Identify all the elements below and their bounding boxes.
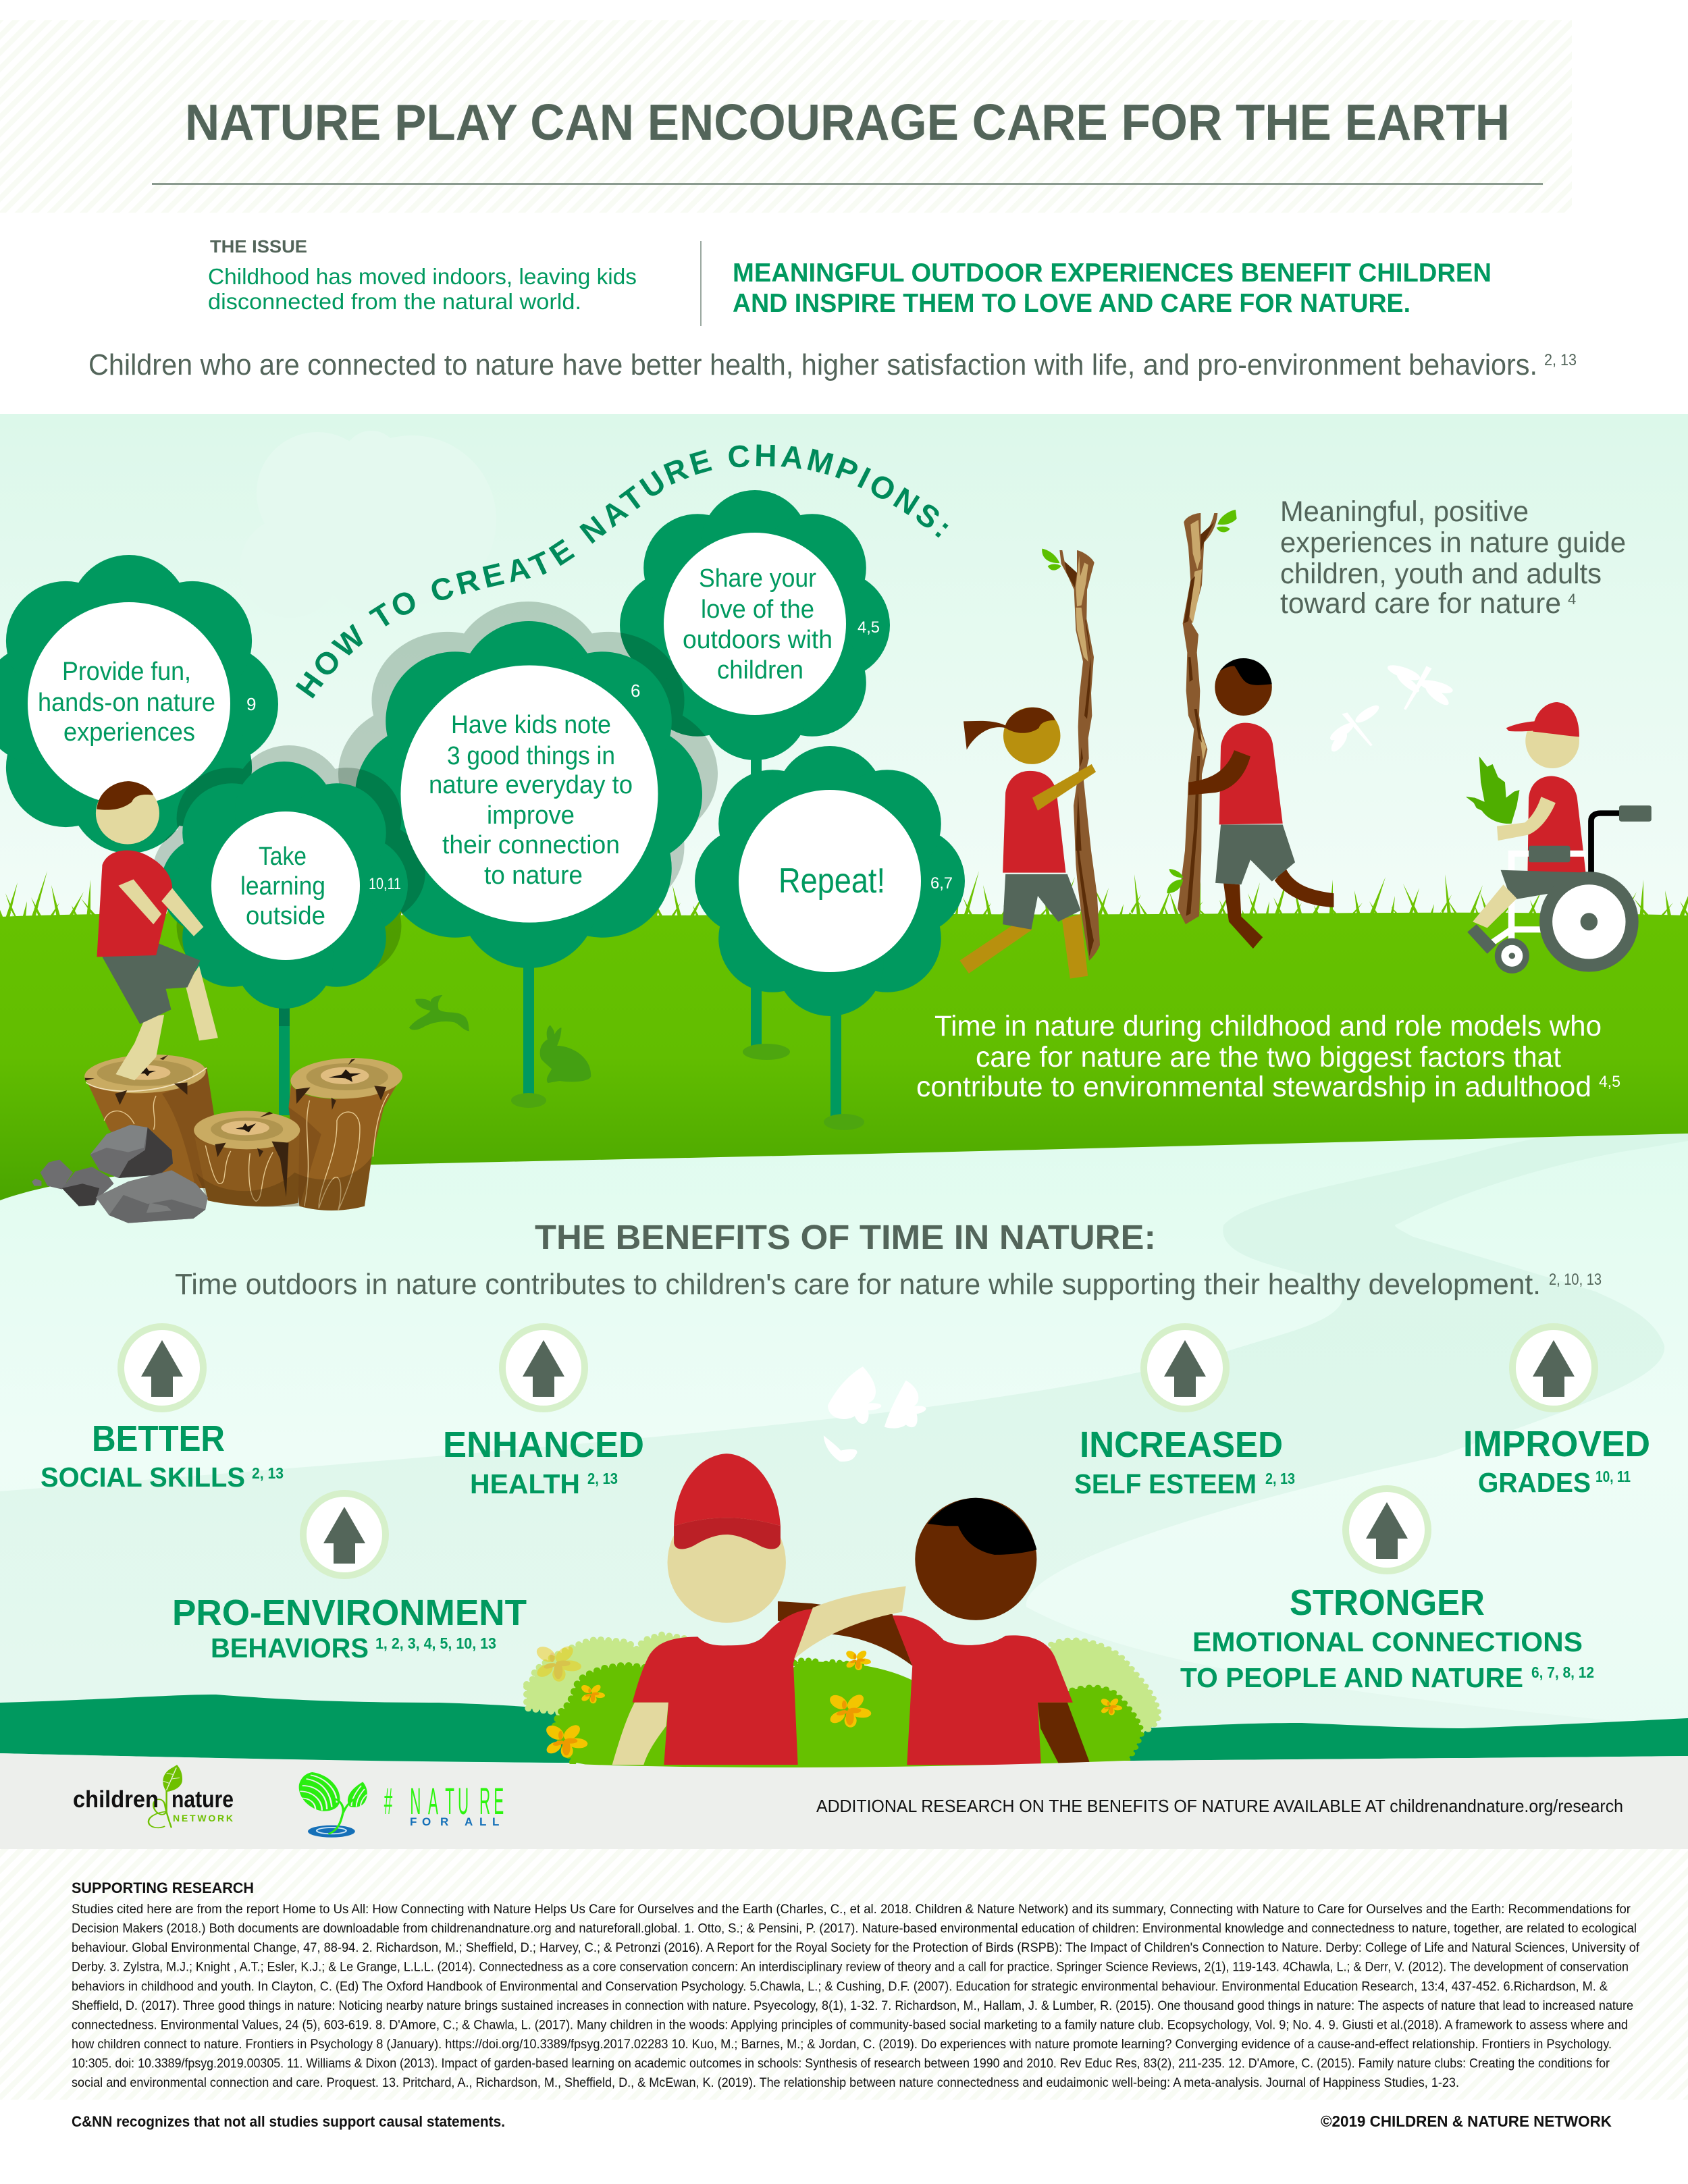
cap dome bbox=[674, 1454, 781, 1526]
boy with stick bbox=[1167, 510, 1334, 949]
shirt bbox=[97, 851, 172, 957]
handle bbox=[1591, 814, 1622, 873]
references: how children connect to nature. Frontiers in Psychology 8 (January). https://doi.org/10.3389/fpsyg.2017.02283 10. Kuo, M.; Barnes, M.; & Jordan, C. (2019). Do experiences with nature promote learning? Converging evidence of a cause-and-effect relationship. Frontiers in Psychology. bbox=[72, 2037, 1612, 2052]
leaf bunch bbox=[1466, 756, 1519, 824]
benefits heading: THE BENEFITS OF TIME IN NATURE: bbox=[535, 1218, 1156, 1256]
flower: take learning outside: Take bbox=[259, 843, 307, 871]
the issue block: disconnected from the natural world. bbox=[208, 289, 581, 314]
head bbox=[1215, 659, 1272, 716]
flower: take learning outside: learning bbox=[240, 872, 325, 901]
girl with stick bbox=[959, 549, 1100, 978]
benefit: enhanced health bbox=[443, 1327, 644, 1499]
references: behaviors in childhood and youth. In Clayton, C. (Ed) The Oxford Handbook of Environmental and Conservation Psychology. 5.Chawla, L.; & Cushing, D.F. (2007). Education for strategic environmental behaviour. Environmental Education Research, 13:4, 437-452. 6.Richardson, M. & bbox=[72, 1979, 1608, 1994]
standing leg bbox=[115, 1015, 164, 1080]
stewardship statement: contribute to environmental stewardship in adulthood bbox=[916, 1071, 1591, 1103]
friend's arm behind bbox=[778, 1601, 912, 1666]
hashtag nature wordmark: #NATURE bbox=[384, 1780, 504, 1823]
the issue block bbox=[208, 236, 637, 314]
title: NATURE PLAY CAN ENCOURAGE CARE FOR THE EARTH bbox=[185, 94, 1510, 151]
arm bbox=[1032, 764, 1096, 811]
hair bbox=[97, 781, 153, 810]
benefit: stronger emotional connections: TO PEOPLE AND NATURE bbox=[1180, 1662, 1523, 1693]
logo: children and nature network: nature bbox=[172, 1786, 234, 1813]
meaningful experiences text: 4 bbox=[1568, 591, 1576, 608]
logo: children and nature network: children bbox=[73, 1786, 159, 1813]
cap band bbox=[674, 1518, 781, 1549]
green ground band bbox=[0, 1695, 1688, 1763]
boy climbing stumps bbox=[96, 781, 218, 1080]
lower section background with swoosh bbox=[0, 1114, 1688, 1776]
hair bbox=[964, 708, 1055, 749]
benefit: increased self esteem: SELF ESTEEM bbox=[1074, 1468, 1257, 1499]
arm around friend bbox=[794, 1587, 906, 1659]
stewardship statement: care for nature are the two biggest factors that bbox=[976, 1041, 1561, 1073]
key message: MEANINGFUL OUTDOOR EXPERIENCES BENEFIT CHILDREN bbox=[733, 259, 1492, 288]
logo: nature for all bbox=[299, 1772, 504, 1838]
head bbox=[668, 1502, 786, 1623]
wheelchair frame bbox=[1493, 853, 1586, 942]
stump base shade bbox=[196, 1156, 372, 1210]
meaningful experiences text: children, youth and adults bbox=[1280, 558, 1602, 590]
shirt bbox=[633, 1609, 812, 1765]
references: Studies cited here are from the report Home to Us All: How Connecting with Nature Helps Us Care for Ourselves and the Earth (Charles, C., et al. 2018. Children & Nature Network) and its summary, Connecting with Nature to Care for Ourselves and the Earth: Recommendations for bbox=[72, 1902, 1631, 1917]
shirt bbox=[893, 1616, 1073, 1765]
flower: have kids note, text disc: nature everyday to bbox=[429, 771, 633, 799]
benefit: improved grades: GRADES bbox=[1478, 1467, 1591, 1498]
causal disclaimer: C&NN recognizes that not all studies support causal statements. bbox=[72, 2113, 505, 2130]
stewardship statement: 4,5 bbox=[1599, 1073, 1620, 1091]
benefit: increased self esteem: 2, 13 bbox=[1265, 1470, 1295, 1487]
intro statement: Children who are connected to nature have better health, higher satisfaction with life, and pro-environment behaviors. bbox=[88, 348, 1537, 381]
shorts bbox=[102, 942, 201, 1024]
logo: children and nature network: NETWORK bbox=[173, 1813, 233, 1823]
flower: repeat bbox=[695, 746, 965, 1130]
flower: provide fun: experiences bbox=[63, 718, 195, 747]
yellow flowers on bushes bbox=[534, 1643, 1122, 1758]
flower: share your love: Share your bbox=[699, 564, 816, 593]
flower: have kids note, text disc: to nature bbox=[484, 861, 583, 890]
benefits heading: 2, 10, 13 bbox=[1549, 1271, 1602, 1289]
shirt bbox=[1219, 723, 1283, 824]
flower: share your love bbox=[620, 490, 890, 1060]
main bushes bbox=[555, 1661, 864, 1768]
legs bbox=[959, 914, 1088, 978]
benefit: better social skills: BETTER bbox=[92, 1418, 225, 1459]
meaningful experiences text: toward care for nature bbox=[1280, 587, 1561, 620]
curved heading: how to create nature champions: HOW TO CREATE NATURE CHAMPIONS: bbox=[296, 444, 948, 699]
foot plate bbox=[1467, 924, 1496, 954]
arms bbox=[118, 880, 203, 936]
red cap bbox=[1506, 702, 1579, 737]
boy with dark hair, back view bbox=[893, 1498, 1090, 1765]
flower: repeat: 6,7 bbox=[930, 874, 953, 893]
benefits heading bbox=[175, 1218, 1602, 1301]
head bbox=[1525, 714, 1579, 768]
benefit: stronger emotional connections: 6, 7, 8, 12 bbox=[1531, 1663, 1594, 1681]
tree stumps bbox=[84, 1052, 404, 1210]
large wheel bbox=[1539, 872, 1639, 972]
intro statement: 2, 13 bbox=[1544, 351, 1577, 369]
stump three bbox=[288, 1055, 404, 1210]
hair bbox=[928, 1498, 1036, 1555]
flower: have kids note, text disc: 6 bbox=[631, 681, 640, 701]
flower: repeat: Repeat! bbox=[779, 861, 885, 901]
key message bbox=[733, 259, 1492, 318]
references: social and environmental connection and care. Proquest. 13. Pritchard, A., Richardson, M., Sheffield, D., & McEwan, K. (2019). The relationship between nature connectedness and eudaimonic well-being: A meta-analysis. Journal of Happiness Studies, 1-23. bbox=[72, 2075, 1459, 2090]
shorts bbox=[1215, 824, 1295, 884]
flower: take learning outside: outside bbox=[246, 902, 325, 930]
key message: AND INSPIRE THEM TO LOVE AND CARE FOR NATURE. bbox=[733, 289, 1410, 318]
flower: provide fun: Provide fun, bbox=[62, 658, 191, 686]
head bbox=[1003, 708, 1060, 764]
head bbox=[96, 782, 159, 845]
benefit: pro-environment behaviors: 1, 2, 3, 4, 5, 10, 13 bbox=[375, 1634, 496, 1652]
benefit: enhanced health: HEALTH bbox=[470, 1468, 580, 1499]
flower: have kids note, text disc: improve bbox=[487, 801, 575, 830]
additional research note: ADDITIONAL RESEARCH ON THE BENEFITS OF NATURE AVAILABLE AT childrenandnature.org/research bbox=[816, 1796, 1623, 1816]
meaningful experiences text: Meaningful, positive bbox=[1280, 496, 1529, 528]
benefit: increased self esteem: INCREASED bbox=[1080, 1424, 1283, 1465]
butterflies bbox=[824, 1366, 926, 1462]
references: Decision Makers (2018.) Both documents are downloadable from childrenandnature.org and natureforall.global. 1. Otto, S.; & Pensini, P. (2017). Nature-based environmental education of children: Environmental knowledge and connectedness to nature, together, are related to ecological bbox=[72, 1921, 1637, 1936]
bushes bbox=[527, 1635, 1159, 1768]
boy with red cap, back view bbox=[612, 1454, 912, 1765]
left arm bbox=[612, 1703, 668, 1765]
clouds bbox=[240, 431, 496, 618]
flower: have kids note, backing bbox=[338, 602, 718, 1108]
logo: nature for all: FOR ALL bbox=[410, 1815, 499, 1828]
leaves two bbox=[1217, 510, 1237, 532]
flower: share your love: children bbox=[717, 656, 803, 685]
benefit: enhanced health: 2, 13 bbox=[587, 1470, 618, 1487]
head bbox=[915, 1498, 1036, 1620]
references bbox=[72, 1902, 1640, 2090]
benefits heading: Time outdoors in nature contributes to children's care for nature while supporting their healthy development. bbox=[175, 1268, 1541, 1301]
flower: share your love: love of the bbox=[701, 595, 814, 624]
raised leg bbox=[186, 965, 218, 1040]
footer band bbox=[0, 1753, 1688, 1849]
light bushes bbox=[527, 1635, 684, 1720]
meaningful experiences text bbox=[1280, 496, 1626, 620]
leg bbox=[1473, 884, 1516, 928]
flower: provide fun: hands-on nature bbox=[38, 689, 215, 717]
benefit: pro-environment behaviors: BEHAVIORS bbox=[211, 1632, 369, 1663]
benefit: improved grades: 10, 11 bbox=[1595, 1468, 1631, 1485]
stewardship statement bbox=[916, 1010, 1620, 1103]
legs bbox=[1223, 868, 1334, 949]
arm bbox=[1497, 797, 1556, 841]
leaves one bbox=[1042, 549, 1061, 570]
dragonflies bbox=[1327, 662, 1454, 754]
stump one bbox=[84, 1052, 214, 1188]
rocks bbox=[32, 1125, 208, 1223]
benefit: better social skills bbox=[41, 1327, 284, 1493]
hair bbox=[1219, 658, 1272, 685]
meaningful experiences text: experiences in nature guide bbox=[1280, 527, 1626, 559]
child in wheelchair bbox=[1466, 702, 1652, 974]
benefit: enhanced health: ENHANCED bbox=[443, 1424, 644, 1465]
stewardship statement: Time in nature during childhood and role models who bbox=[934, 1010, 1602, 1042]
stump two bbox=[194, 1111, 300, 1206]
flower: take learning outside bbox=[153, 745, 425, 1115]
shirt bbox=[1527, 776, 1586, 873]
supporting research panel bbox=[0, 1849, 1688, 2100]
benefit: stronger emotional connections: EMOTIONAL CONNECTIONS bbox=[1192, 1626, 1583, 1657]
benefit: better social skills: SOCIAL SKILLS bbox=[41, 1462, 245, 1493]
benefit: stronger emotional connections: STRONGER bbox=[1290, 1582, 1485, 1623]
grass blades bbox=[0, 868, 1688, 918]
the issue block: Childhood has moved indoors, leaving kids bbox=[208, 264, 637, 289]
stick one bbox=[1059, 550, 1100, 961]
the issue block: THE ISSUE bbox=[210, 236, 307, 257]
green hill bbox=[0, 913, 1688, 1200]
benefit: improved grades: IMPROVED bbox=[1463, 1424, 1650, 1464]
benefit: stronger emotional connections bbox=[1180, 1489, 1594, 1693]
nature scene panel bbox=[0, 414, 1688, 1200]
flower: provide fun: 9 bbox=[246, 694, 256, 714]
rabbits bbox=[409, 995, 591, 1083]
benefit: improved grades bbox=[1463, 1327, 1650, 1498]
benefit: pro-environment behaviors bbox=[172, 1493, 527, 1663]
lower leaf bbox=[1167, 869, 1183, 893]
stick two bbox=[1178, 513, 1217, 924]
shirt bbox=[1003, 771, 1065, 873]
benefit: pro-environment behaviors: PRO-ENVIRONMENT bbox=[172, 1593, 527, 1633]
arm bbox=[1188, 750, 1250, 795]
copyright: ©2019 CHILDREN & NATURE NETWORK bbox=[1321, 2112, 1612, 2130]
shorts bbox=[1003, 874, 1081, 930]
flower: have kids note, text disc bbox=[401, 666, 658, 922]
logo: children and nature network bbox=[73, 1765, 234, 1828]
benefit: increased self esteem bbox=[1074, 1327, 1295, 1499]
flower: provide fun bbox=[0, 555, 278, 853]
lap belt bbox=[1529, 846, 1570, 862]
flower: share your love: 4,5 bbox=[858, 618, 880, 637]
flower: have kids note, text disc: 3 good things in bbox=[447, 742, 615, 770]
benefit: better social skills: 2, 13 bbox=[252, 1464, 284, 1482]
flower: have kids note, text disc: their connection bbox=[442, 831, 620, 859]
flower: take learning outside: 10,11 bbox=[369, 875, 401, 893]
right arm bbox=[1038, 1703, 1090, 1765]
supporting research heading: SUPPORTING RESEARCH bbox=[72, 1880, 254, 1896]
header panel bbox=[0, 20, 1572, 213]
flower: share your love: outdoors with bbox=[683, 626, 833, 654]
small wheel bbox=[1495, 938, 1529, 974]
flower: have kids note, text disc: Have kids note bbox=[451, 711, 611, 739]
seat and shorts bbox=[1501, 870, 1589, 900]
